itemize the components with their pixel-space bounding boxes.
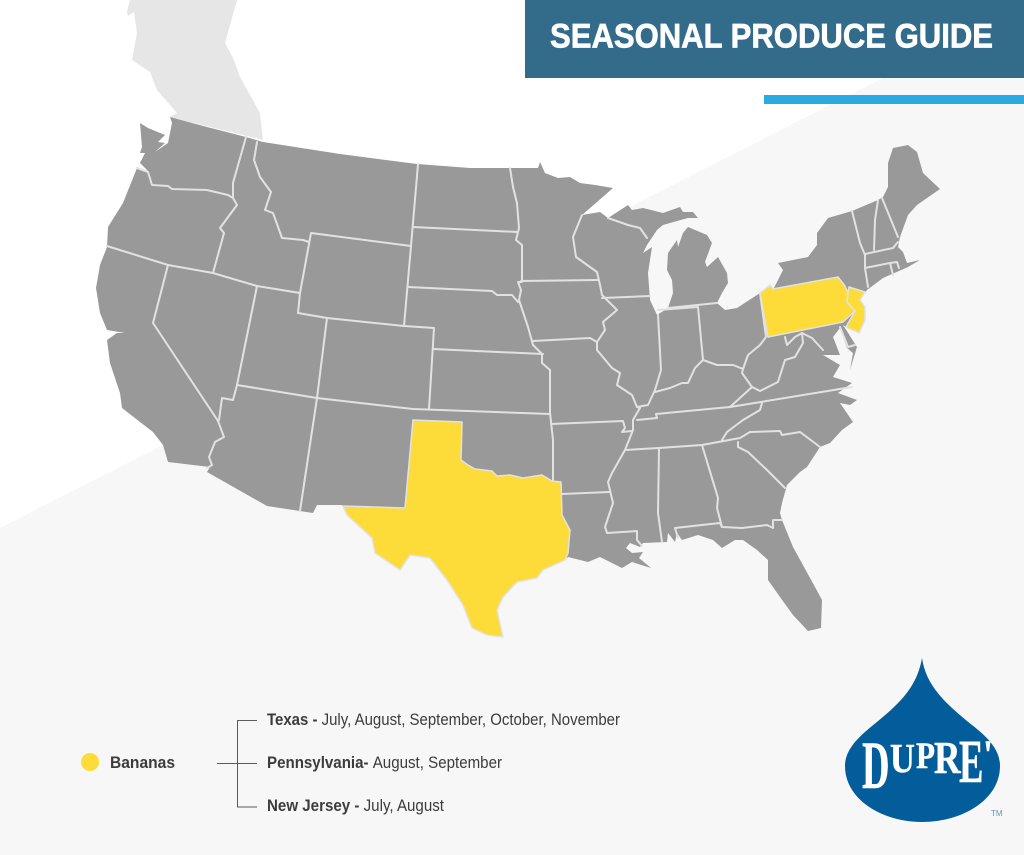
map: United States [96,117,940,637]
logo drop [845,658,1000,822]
bracket connector [217,720,257,807]
state: Texas [343,420,570,637]
legend marker: yellow dot [81,753,99,771]
legend [81,710,620,815]
logo wordmark: P [916,736,935,777]
state borders [107,137,899,546]
trademark: TM [991,809,1003,818]
Pennsylvania months: Pennsylvania- August, September [267,753,502,772]
logo wordmark: E [959,729,983,796]
accent bar [764,95,1024,104]
map silhouette [96,117,940,637]
logo wordmark: D [862,727,890,803]
logo wordmark: R [934,732,961,782]
Texas months: Texas - July, August, September, October, November [267,710,620,729]
New Jersey months: New Jersey - July, August [267,796,444,815]
logo wordmark: U [890,735,915,781]
header banner [525,0,1024,78]
legend label: Bananas: Bananas [110,753,175,772]
Canada landmass [127,0,263,140]
logo wordmark: ' [983,732,993,777]
state: Pennsylvania [760,277,855,337]
state: New Jersey [846,287,865,333]
